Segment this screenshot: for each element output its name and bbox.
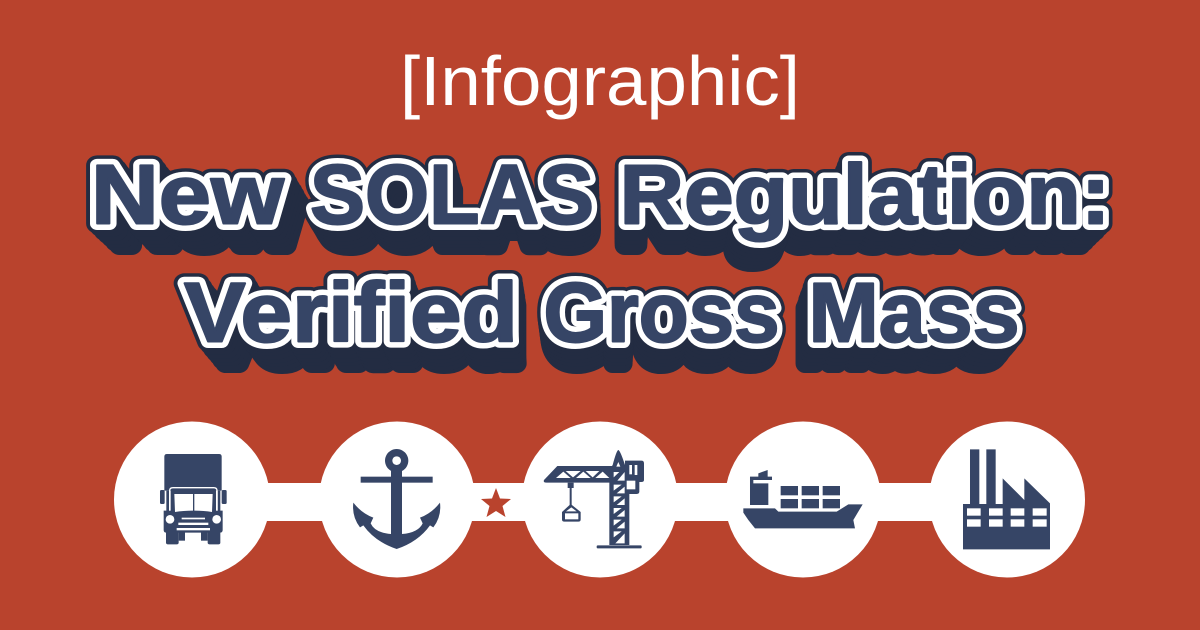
title: New SOLAS Regulation: Verified Gross Mass: Regulation: — [619, 152, 1107, 245]
title: New SOLAS Regulation: Verified Gross Mass: Verified — [184, 266, 518, 360]
title: New SOLAS Regulation: Verified Gross Mass: New — [91, 148, 285, 242]
title: New SOLAS Regulation: Verified Gross Mass: Regulation: — [619, 156, 1103, 249]
title: New SOLAS Regulation: Verified Gross Mass: Gross — [545, 283, 775, 374]
title: New SOLAS Regulation: Verified Gross Mass: Mass — [808, 266, 1020, 360]
title: New SOLAS Regulation: Verified Gross Mass: Gross — [546, 288, 773, 378]
title: New SOLAS Regulation: Verified Gross Mass: Gross — [544, 274, 777, 367]
icon: anchor — [353, 449, 440, 549]
title: New SOLAS Regulation: Verified Gross Mass: Verified — [200, 288, 521, 378]
icon: container ship — [743, 470, 863, 528]
title: New SOLAS Regulation: Verified Gross Mass: New — [95, 152, 288, 245]
title: New SOLAS Regulation: Verified Gross Mass: Mass — [806, 274, 1013, 367]
title: New SOLAS Regulation: Verified Gross Mass: SOLAS — [310, 148, 594, 242]
title: New SOLAS Regulation: Verified Gross Mass: SOLAS — [310, 148, 594, 242]
title: New SOLAS Regulation: Verified Gross Mass: New — [99, 156, 289, 249]
title: New SOLAS Regulation: Verified Gross Mass: New — [91, 148, 285, 242]
title: New SOLAS Regulation: Verified Gross Mass: SOLAS — [310, 148, 594, 242]
title: New SOLAS Regulation: Verified Gross Mass: Regulation: — [619, 165, 1096, 256]
title: New SOLAS Regulation: Verified Gross Mass: SOLAS — [323, 174, 595, 264]
icon: factory — [963, 449, 1050, 549]
connector band with circles — [114, 422, 1085, 578]
title: New SOLAS Regulation: Verified Gross Mass: Mass — [807, 270, 1017, 363]
title: New SOLAS Regulation: Verified Gross Mass: SOLAS — [319, 165, 594, 256]
title: New SOLAS Regulation: Verified Gross Mass: SOLAS — [312, 152, 594, 245]
title: New SOLAS Regulation: Verified Gross Mass: Gross — [544, 270, 778, 363]
title: New SOLAS Regulation: Verified Gross Mass: New — [91, 148, 285, 242]
title: New SOLAS Regulation: Verified Gross Mass: Verified — [203, 292, 522, 382]
title: New SOLAS Regulation: Verified Gross Mass: Gross — [544, 266, 780, 360]
title: New SOLAS Regulation: Verified Gross Mass: New — [110, 170, 297, 260]
title: New SOLAS Regulation: Verified Gross Mass: Regulation: — [619, 162, 1099, 253]
title: New SOLAS Regulation: Verified Gross Mass: Verified — [196, 283, 521, 374]
title: New SOLAS Regulation: Verified Gross Mass: Mass — [804, 280, 1010, 371]
title: New SOLAS Regulation: Verified Gross Mass: Verified — [184, 266, 518, 360]
title: New SOLAS Regulation: Verified Gross Mass: Gross — [544, 266, 780, 360]
title: New SOLAS Regulation: Verified Gross Mass: New — [106, 165, 294, 256]
title: New SOLAS Regulation: Verified Gross Mass: Mass — [808, 266, 1020, 360]
title: New SOLAS Regulation: Verified Gross Mass: Verified — [187, 270, 519, 363]
title: New SOLAS Regulation: Verified Gross Mass: New — [102, 162, 292, 253]
title: New SOLAS Regulation: Verified Gross Mass: Mass — [808, 266, 1020, 360]
title: New SOLAS Regulation: Verified Gross Mass: Mass — [800, 292, 1001, 382]
title: New SOLAS Regulation: Verified Gross Mass: SOLAS — [321, 170, 595, 260]
title: New SOLAS Regulation: Verified Gross Mass: Gross — [546, 292, 772, 382]
icon: tower crane — [544, 450, 644, 548]
icon: truck — [160, 454, 227, 544]
title: New SOLAS Regulation: Verified Gross Mass: New — [114, 174, 299, 264]
title: New SOLAS Regulation: Verified Gross Mass: Mass — [803, 283, 1007, 374]
title: New SOLAS Regulation: Verified Gross Mass: Regulation: — [620, 148, 1110, 242]
title: New SOLAS Regulation: Verified Gross Mass: Regulation: — [620, 148, 1110, 242]
title: New SOLAS Regulation: Verified Gross Mass: Mass — [801, 288, 1004, 378]
title: New SOLAS Regulation: Verified Gross Mass: Regulation: — [619, 174, 1088, 264]
title: New SOLAS Regulation: Verified Gross Mass: Verified — [190, 274, 519, 367]
title: New SOLAS Regulation: Verified Gross Mass: Regulation: — [620, 148, 1110, 242]
title: New SOLAS Regulation: Verified Gross Mass: Verified — [184, 266, 518, 360]
title: New SOLAS Regulation: Verified Gross Mass: Gross — [545, 280, 776, 371]
title: New SOLAS Regulation: Verified Gross Mass: SOLAS — [317, 162, 594, 253]
subtitle: [Infographic]: [Infographic] — [400, 42, 800, 120]
title: New SOLAS Regulation: Verified Gross Mass: SOLAS — [314, 156, 594, 249]
icon: star marker — [481, 488, 511, 517]
title: New SOLAS Regulation: Verified Gross Mass: Verified — [193, 280, 520, 371]
title: New SOLAS Regulation: Verified Gross Mass: Regulation: — [619, 170, 1092, 260]
title: New SOLAS Regulation: Verified Gross Mass — [91, 148, 1110, 382]
title: New SOLAS Regulation: Verified Gross Mass: Gross — [544, 266, 780, 360]
